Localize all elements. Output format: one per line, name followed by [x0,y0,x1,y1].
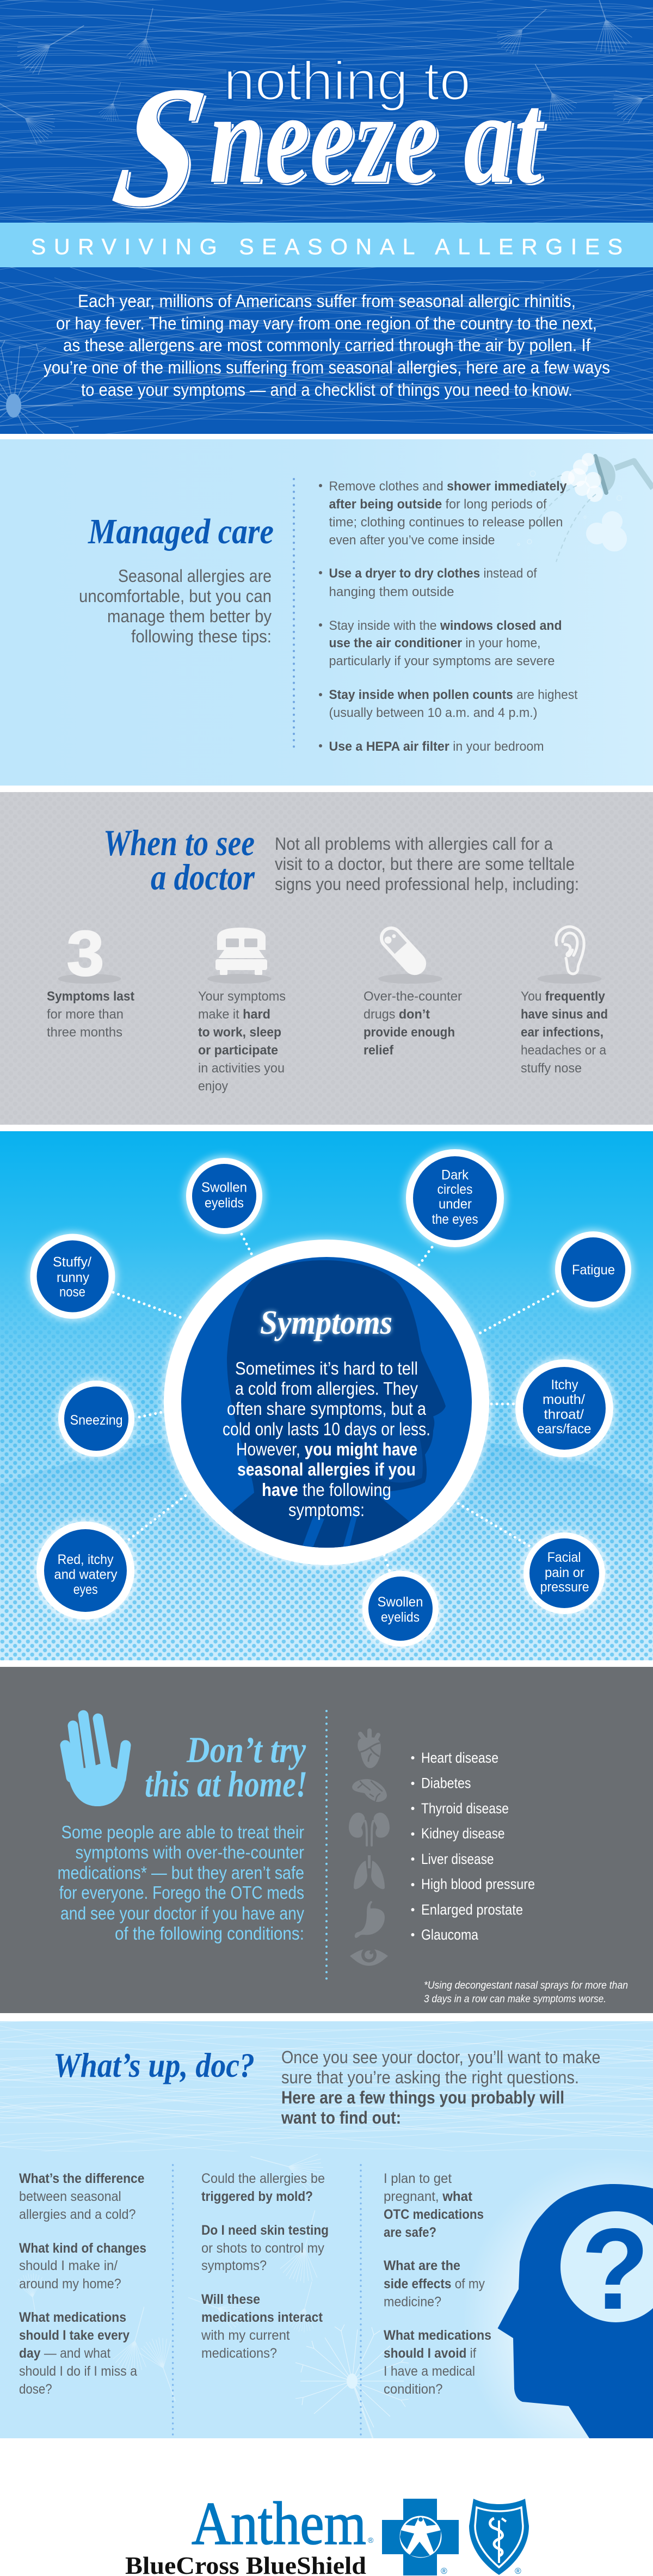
text: hard to work [198,989,286,1094]
bubble: itchy: ears/face [537,1421,591,1437]
questions: column 1: dose? [19,2382,52,2397]
heading: when to see a doctor: When to see [103,822,255,863]
bubble: dark circles: the eyes [432,1212,478,1227]
text: hard to work: Your symptoms [198,989,286,1004]
heading: managed care: Managed care [88,512,274,551]
icon: pill [375,922,431,980]
intro paragraph [44,291,610,400]
bubble: swollen eyelids [186,1158,262,1234]
questions: column 1: What medications [19,2310,126,2325]
icon: shower [518,453,653,562]
text: hard to work: in activities you [198,1061,285,1076]
questions: column 1: What kind of changes [19,2241,146,2256]
bubble: stuffy nose: runny [57,1270,89,1285]
questions: column 2: medications? [201,2346,277,2361]
footnote: 3 days in a row can make symptoms worse. [424,1994,606,2005]
logo: Anthem Blue Cross Blue Shield [125,2490,529,2576]
text: symptoms last: Symptoms last [47,989,134,1004]
bubble: sneezing: Sneezing [70,1413,123,1428]
list: managed care tips: Use a HEPA air filter in your bedroom [329,739,544,754]
questions: column 2: triggered by mold? [201,2189,313,2204]
bubble: stuffy nose [30,1234,115,1318]
icon: eye [350,1947,388,1966]
text: over-the-counter: drugs don’t [364,1007,430,1022]
bubble: dark circles: circles [438,1182,472,1197]
icon: lungs [354,1855,385,1889]
list: conditions: Liver disease [421,1851,494,1867]
questions: column 1: between seasonal [19,2189,121,2204]
questions: column 1 [19,2171,146,2397]
bubble: swollen eyelids: Swollen [201,1180,247,1195]
wordmark: Anthem: Anthem [192,2490,366,2557]
text: symptoms paragraph: a cold from allergies. They [235,1378,418,1399]
heading: when to see a doctor: a doctor [151,856,255,898]
bubble: itchy: Itchy [551,1377,578,1393]
list: managed care tips: Remove clothes and shower immediately [329,479,567,494]
panel: managed care [0,439,653,786]
text: hard to work: to work, sleep [198,1025,281,1040]
icon: kidneys [349,1813,390,1845]
questions: column 1: day — and what [19,2346,110,2361]
questions: column 1: should I do if I miss a [19,2364,137,2379]
list: managed care tips: use the air conditioner in your home, [329,636,541,651]
questions: column 2: symptoms? [201,2258,267,2273]
questions: column 3: OTC medications [384,2207,484,2222]
bubble: facial pain: pressure [540,1580,589,1595]
bubble: red eyes: Red, itchy [58,1552,114,1567]
subtitle band: SURVIVING SEASONAL ALLERGIES [31,234,623,259]
list: conditions: Glaucoma [421,1927,478,1943]
bubble: red eyes: eyes [73,1582,98,1597]
bubble: facial pain [523,1532,605,1614]
list: managed care tips: even after you’ve come inside [329,533,495,548]
list: managed care tips: particularly if your symptoms are severe [329,654,555,668]
bubble: dark circles: Dark [441,1167,469,1182]
text: symptoms last: three months [47,1025,122,1040]
bubble: sneezing [58,1381,134,1457]
heading: symptoms: Symptoms [260,1304,392,1341]
bubble: swollen eyelids lower: Swollen [378,1594,423,1610]
text: frequent infections: headaches or a [521,1043,606,1058]
text: otc warning: medications* — but they aren’t safe [58,1863,304,1882]
text: frequent infections: ear infections, [521,1025,603,1040]
bubble: stuffy nose: nose [59,1285,85,1300]
list: conditions: Enlarged prostate [421,1902,523,1918]
head silhouette [218,1260,446,1557]
questions: column 3: What are the [384,2258,460,2273]
questions: column 1: should I take every [19,2328,130,2343]
list: managed care tips [319,479,578,754]
questions: column 3: medicine? [384,2294,441,2309]
icon: blue shield: ® [515,2567,521,2576]
icon: blue cross: ® [441,2567,447,2576]
questions: column 2: with my current [201,2328,290,2343]
heading: don't try this at home [145,1729,307,1805]
text: doc intro: Here are a few things you probably will [281,2088,564,2107]
text: managed care intro: Seasonal allergies are [118,566,272,586]
text: hard to work: or participate [198,1043,278,1058]
text: otc warning: of the following conditions: [115,1923,304,1943]
questions: column 2: or shots to control my [201,2241,324,2256]
title: Sneeze at [102,51,545,242]
icon: brain [352,1779,387,1802]
text: doctor intro: visit to a doctor, but there are some telltale [275,854,575,874]
text: doctor intro [275,834,579,894]
heading: when to see a doctor [103,822,255,898]
text: symptoms paragraph: cold only lasts 10 days or less. [223,1419,430,1439]
questions: column 3: side effects of my [384,2277,485,2292]
list: managed care tips: Stay inside with the windows closed and [329,618,562,633]
bubble: dark circles [406,1149,504,1247]
questions: column 3 [384,2171,491,2397]
icon: stomach [355,1902,384,1937]
text: managed care intro: manage them better by [107,606,272,626]
questions: column 2: Do I need skin testing [201,2223,329,2238]
text: symptoms paragraph: often share symptoms, but a [227,1399,427,1419]
intro paragraph: you’re one of the millions suffering from seasonal allergies, here are a few ways [44,358,610,377]
text: managed care intro: following these tips: [131,627,272,646]
text: symptoms paragraph: seasonal allergies if you [237,1459,416,1480]
text: doc intro: want to find out: [281,2108,401,2127]
bubble: itchy [515,1359,613,1457]
footnote [424,1980,628,2005]
text: managed care intro [79,566,272,646]
text: symptoms last [47,989,134,1040]
text: doc intro: Once you see your doctor, you’ll want to make [281,2047,601,2067]
icon: ear [556,927,584,974]
icon: blue shield [469,2499,529,2576]
bubble: fatigue: Fatigue [572,1262,615,1278]
text: symptoms paragraph: Sometimes it’s hard to tell [235,1358,418,1378]
text: managed care intro: uncomfortable, but you can [79,586,272,606]
text: otc warning [58,1822,304,1943]
heading: don't try this at home: this at home! [145,1763,307,1805]
intro paragraph: as these allergens are most commonly carried through the air by pollen. If [63,335,590,355]
questions: column 2: Will these [201,2292,260,2307]
bubble: facial pain: pain or [545,1565,584,1580]
text: symptoms paragraph: symptoms: [288,1500,365,1520]
text: symptoms paragraph [223,1358,430,1520]
text: doctor intro: signs you need professional help, including: [275,874,579,894]
text: over-the-counter: provide enough [364,1025,455,1040]
questions: column 2 [201,2171,329,2361]
questions: column 1: allergies and a cold? [19,2207,136,2222]
questions: column 3: What medications [384,2328,491,2343]
list: conditions: High blood pressure [421,1876,535,1892]
questions: column 3: are safe? [384,2225,436,2240]
title: Sneeze at: S [102,51,218,242]
questions: column 3: condition? [384,2382,443,2397]
panel: what's up doc [0,2014,653,2482]
text: hard to work: make it hard [198,1007,270,1022]
text: over-the-counter: relief [364,1043,394,1058]
title: nothing to: nothing to [224,51,471,112]
text: otc warning: and see your doctor if you have any [60,1903,304,1923]
questions: column 2: Could the allergies be [201,2171,325,2186]
questions: column 1: around my home? [19,2277,121,2292]
questions: column 3: I plan to get [384,2171,452,2186]
heading: what's up doc: What’s up, doc? [53,2046,255,2084]
icon: head with question mark [497,2184,653,2438]
text: symptoms paragraph: However, you might have [236,1439,417,1459]
text: hard to work: enjoy [198,1079,229,1094]
bubble: red eyes: and watery [54,1567,118,1582]
bubble: dark circles: under [439,1197,472,1212]
footnote: *Using decongestant nasal sprays for more than [424,1980,628,1991]
list: managed care tips: time; clothing continues to release pollen [329,515,563,530]
text: frequent infections [521,989,608,1076]
text: otc warning: symptoms with over-the-counter [75,1842,304,1862]
logo: Anthem Blue Cross Blue Shield: ® [368,2536,374,2544]
list: managed care tips: (usually between 10 a.m. and 4 p.m.) [329,706,538,720]
list: managed care tips: Use a dryer to dry clothes instead of [329,566,537,581]
text: otc warning: for everyone. Forego the OTC meds [59,1882,304,1903]
text: over-the-counter: Over-the-counter [364,989,462,1004]
text: doc intro [281,2047,601,2127]
text: symptoms paragraph: have the following [262,1480,391,1500]
heading: don't try this at home: Don’t try [186,1729,306,1770]
text: frequent infections: stuffy nose [521,1061,582,1076]
central symptoms circle [164,1240,489,1565]
bubble: swollen eyelids lower: eyelids [381,1610,420,1625]
questions: column 1: What’s the difference [19,2171,145,2186]
text: doctor intro: Not all problems with allergies call for a [275,834,553,854]
questions: column 1: should I make in/ [19,2258,118,2273]
list: conditions: Thyroid disease [421,1800,509,1817]
icon: head with question mark: ? [581,2204,649,2333]
bubble: swollen eyelids: eyelids [205,1195,244,1211]
text: over-the-counter [364,989,462,1058]
list: conditions: Diabetes [421,1775,471,1791]
intro paragraph: or hay fever. The timing may vary from one region of the country to the next, [56,314,597,333]
list: conditions: Kidney disease [421,1825,505,1842]
questions: column 3: I have a medical [384,2364,475,2379]
questions: column 2: medications interact [201,2310,323,2325]
bubble: itchy: throat/ [544,1407,584,1422]
list: conditions [411,1750,535,1943]
text: doc intro: sure that you’re asking the right questions. [281,2068,579,2087]
icon: blue cross [382,2499,459,2576]
icon: bed [215,928,267,975]
list: managed care tips: Stay inside when pollen counts are highest [329,688,578,702]
text: frequent infections: You frequently [521,989,605,1004]
icon: heart [358,1731,381,1768]
intro paragraph: to ease your symptoms — and a checklist of things you need to know. [81,380,572,400]
bubble: red eyes [36,1522,134,1620]
subtitle band [0,223,653,267]
panel: when to see a doctor [0,792,653,1125]
list: managed care tips: after being outside for long periods of [329,497,547,512]
text: frequent infections: have sinus and [521,1007,608,1022]
icon: number 3: 3 [67,918,104,989]
intro paragraph: Each year, millions of Americans suffer from seasonal allergic rhinitis, [78,291,576,311]
panel: symptoms [0,1131,653,1660]
bubble: fatigue [555,1231,631,1308]
questions: column 3: pregnant, what [384,2189,473,2204]
panel: don't try this at home [0,1667,653,2013]
bubble: swollen eyelids lower [362,1571,439,1647]
text: symptoms last: for more than [47,1007,124,1022]
icon: hand [65,1715,131,1806]
text: otc warning: Some people are able to treat their [61,1822,304,1842]
list: managed care tips: hanging them outside [329,585,454,599]
questions: column 3: should I avoid if [384,2346,476,2361]
bubble: facial pain: Facial [547,1550,581,1565]
list: conditions: Heart disease [421,1750,498,1766]
title: Sneeze at: neeze at [209,65,545,210]
bubble: itchy: mouth/ [543,1392,585,1407]
bubble: stuffy nose: Stuffy/ [53,1254,91,1269]
panel: header [0,0,653,459]
